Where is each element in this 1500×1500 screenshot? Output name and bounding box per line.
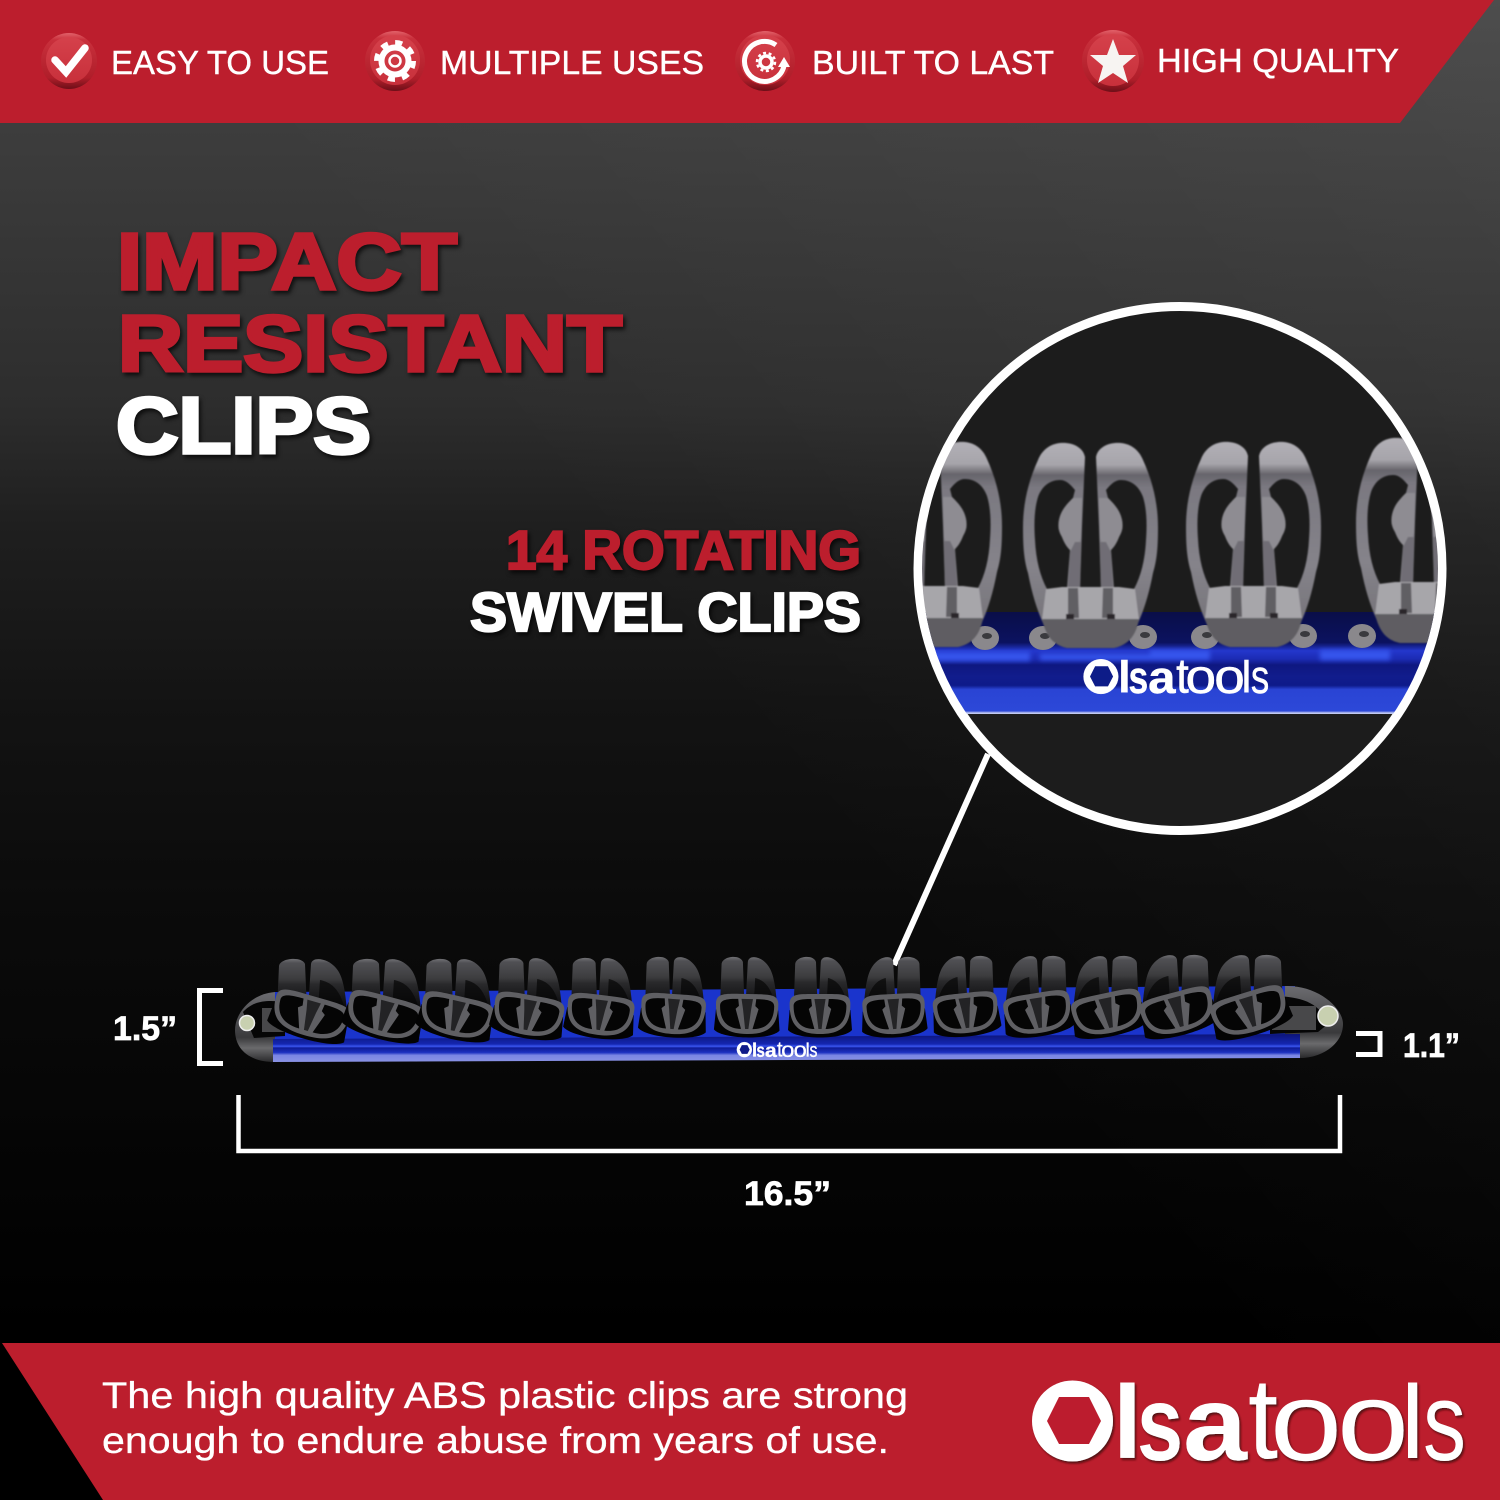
feature: built to last	[735, 31, 1054, 91]
title: IMPACT	[117, 217, 457, 306]
logo: t	[1248, 1355, 1278, 1483]
clip pairs close-up	[922, 436, 1438, 649]
main rail	[273, 1034, 1300, 1062]
logo: l	[1113, 1365, 1142, 1481]
dimension: height 1.5 in: 1.5”	[113, 1010, 177, 1048]
rail logo close-up: O	[1084, 650, 1118, 702]
dimension: length 16.5 in: 16.5”	[744, 1175, 831, 1213]
subheading: 14 rotating swivel clips: 14 ROTATING	[506, 519, 861, 581]
rail logo: l	[752, 1040, 757, 1062]
rail logo close-up: s	[1129, 652, 1148, 703]
feature: high quality: HIGH QUALITY	[1157, 42, 1399, 79]
logo: O	[1033, 1360, 1113, 1481]
logo	[1032, 1355, 1466, 1484]
feature: multiple uses	[365, 31, 704, 91]
rail logo	[737, 1038, 818, 1062]
dimension: height 1.5 in	[113, 990, 223, 1064]
rail logo close-up: a	[1148, 652, 1176, 703]
subheading: 14 rotating swivel clips	[470, 519, 861, 643]
dimension: length 16.5 in	[238, 1095, 1340, 1213]
rail logo close-up: l	[1118, 653, 1131, 702]
feature: multiple uses: MULTIPLE USES	[440, 44, 704, 81]
rail logo close-up: l	[1242, 653, 1251, 702]
dimension: depth 1.1 in	[1356, 1027, 1460, 1065]
rail logo close-up	[1083, 658, 1268, 694]
feature: high quality	[1082, 30, 1399, 92]
title: CLIPS	[116, 381, 371, 470]
rail logo close-up: t	[1176, 648, 1189, 703]
top banner	[0, 0, 1494, 123]
screws	[1029, 626, 1057, 650]
upper rail	[275, 986, 1295, 1042]
logo: s	[1423, 1361, 1466, 1484]
logo: l	[1401, 1365, 1424, 1481]
rail logo: a	[765, 1040, 778, 1062]
feature: easy to use: EASY TO USE	[111, 44, 329, 81]
logo: o	[1337, 1359, 1409, 1484]
logo: s	[1137, 1365, 1183, 1483]
title	[116, 217, 622, 470]
feature: easy to use	[41, 33, 329, 89]
blue rail close-up	[900, 612, 1460, 714]
dimension: depth 1.1 in: 1.1”	[1403, 1027, 1460, 1065]
feature: built to last: BUILT TO LAST	[812, 44, 1054, 81]
description text: enough to endure abuse from years of use.	[102, 1420, 889, 1461]
rail logo close-up: o	[1185, 651, 1216, 704]
rail logo: s	[810, 1039, 818, 1062]
logo: a	[1183, 1365, 1248, 1483]
product: socket rail	[235, 955, 1343, 1062]
zoomed detail circle	[914, 302, 1446, 835]
title: RESISTANT	[118, 299, 622, 388]
rail logo: O	[737, 1040, 752, 1062]
rail logo: o	[794, 1039, 807, 1062]
rail logo: s	[756, 1040, 765, 1062]
description text	[102, 1375, 908, 1461]
rail logo close-up: s	[1251, 650, 1269, 703]
right end cap	[1285, 986, 1343, 1058]
logo: o	[1270, 1359, 1342, 1484]
swivel clips	[265, 955, 1295, 1050]
description text: The high quality ABS plastic clips are strong	[102, 1375, 908, 1416]
rail logo: t	[777, 1038, 783, 1062]
bottom banner	[2, 1343, 1500, 1500]
callout line	[894, 754, 988, 965]
subheading: 14 rotating swivel clips: SWIVEL CLIPS	[470, 581, 861, 643]
left end cap	[235, 992, 275, 1062]
rail logo close-up: o	[1214, 651, 1245, 704]
rail logo: o	[781, 1039, 794, 1062]
rail logo: l	[805, 1040, 810, 1062]
